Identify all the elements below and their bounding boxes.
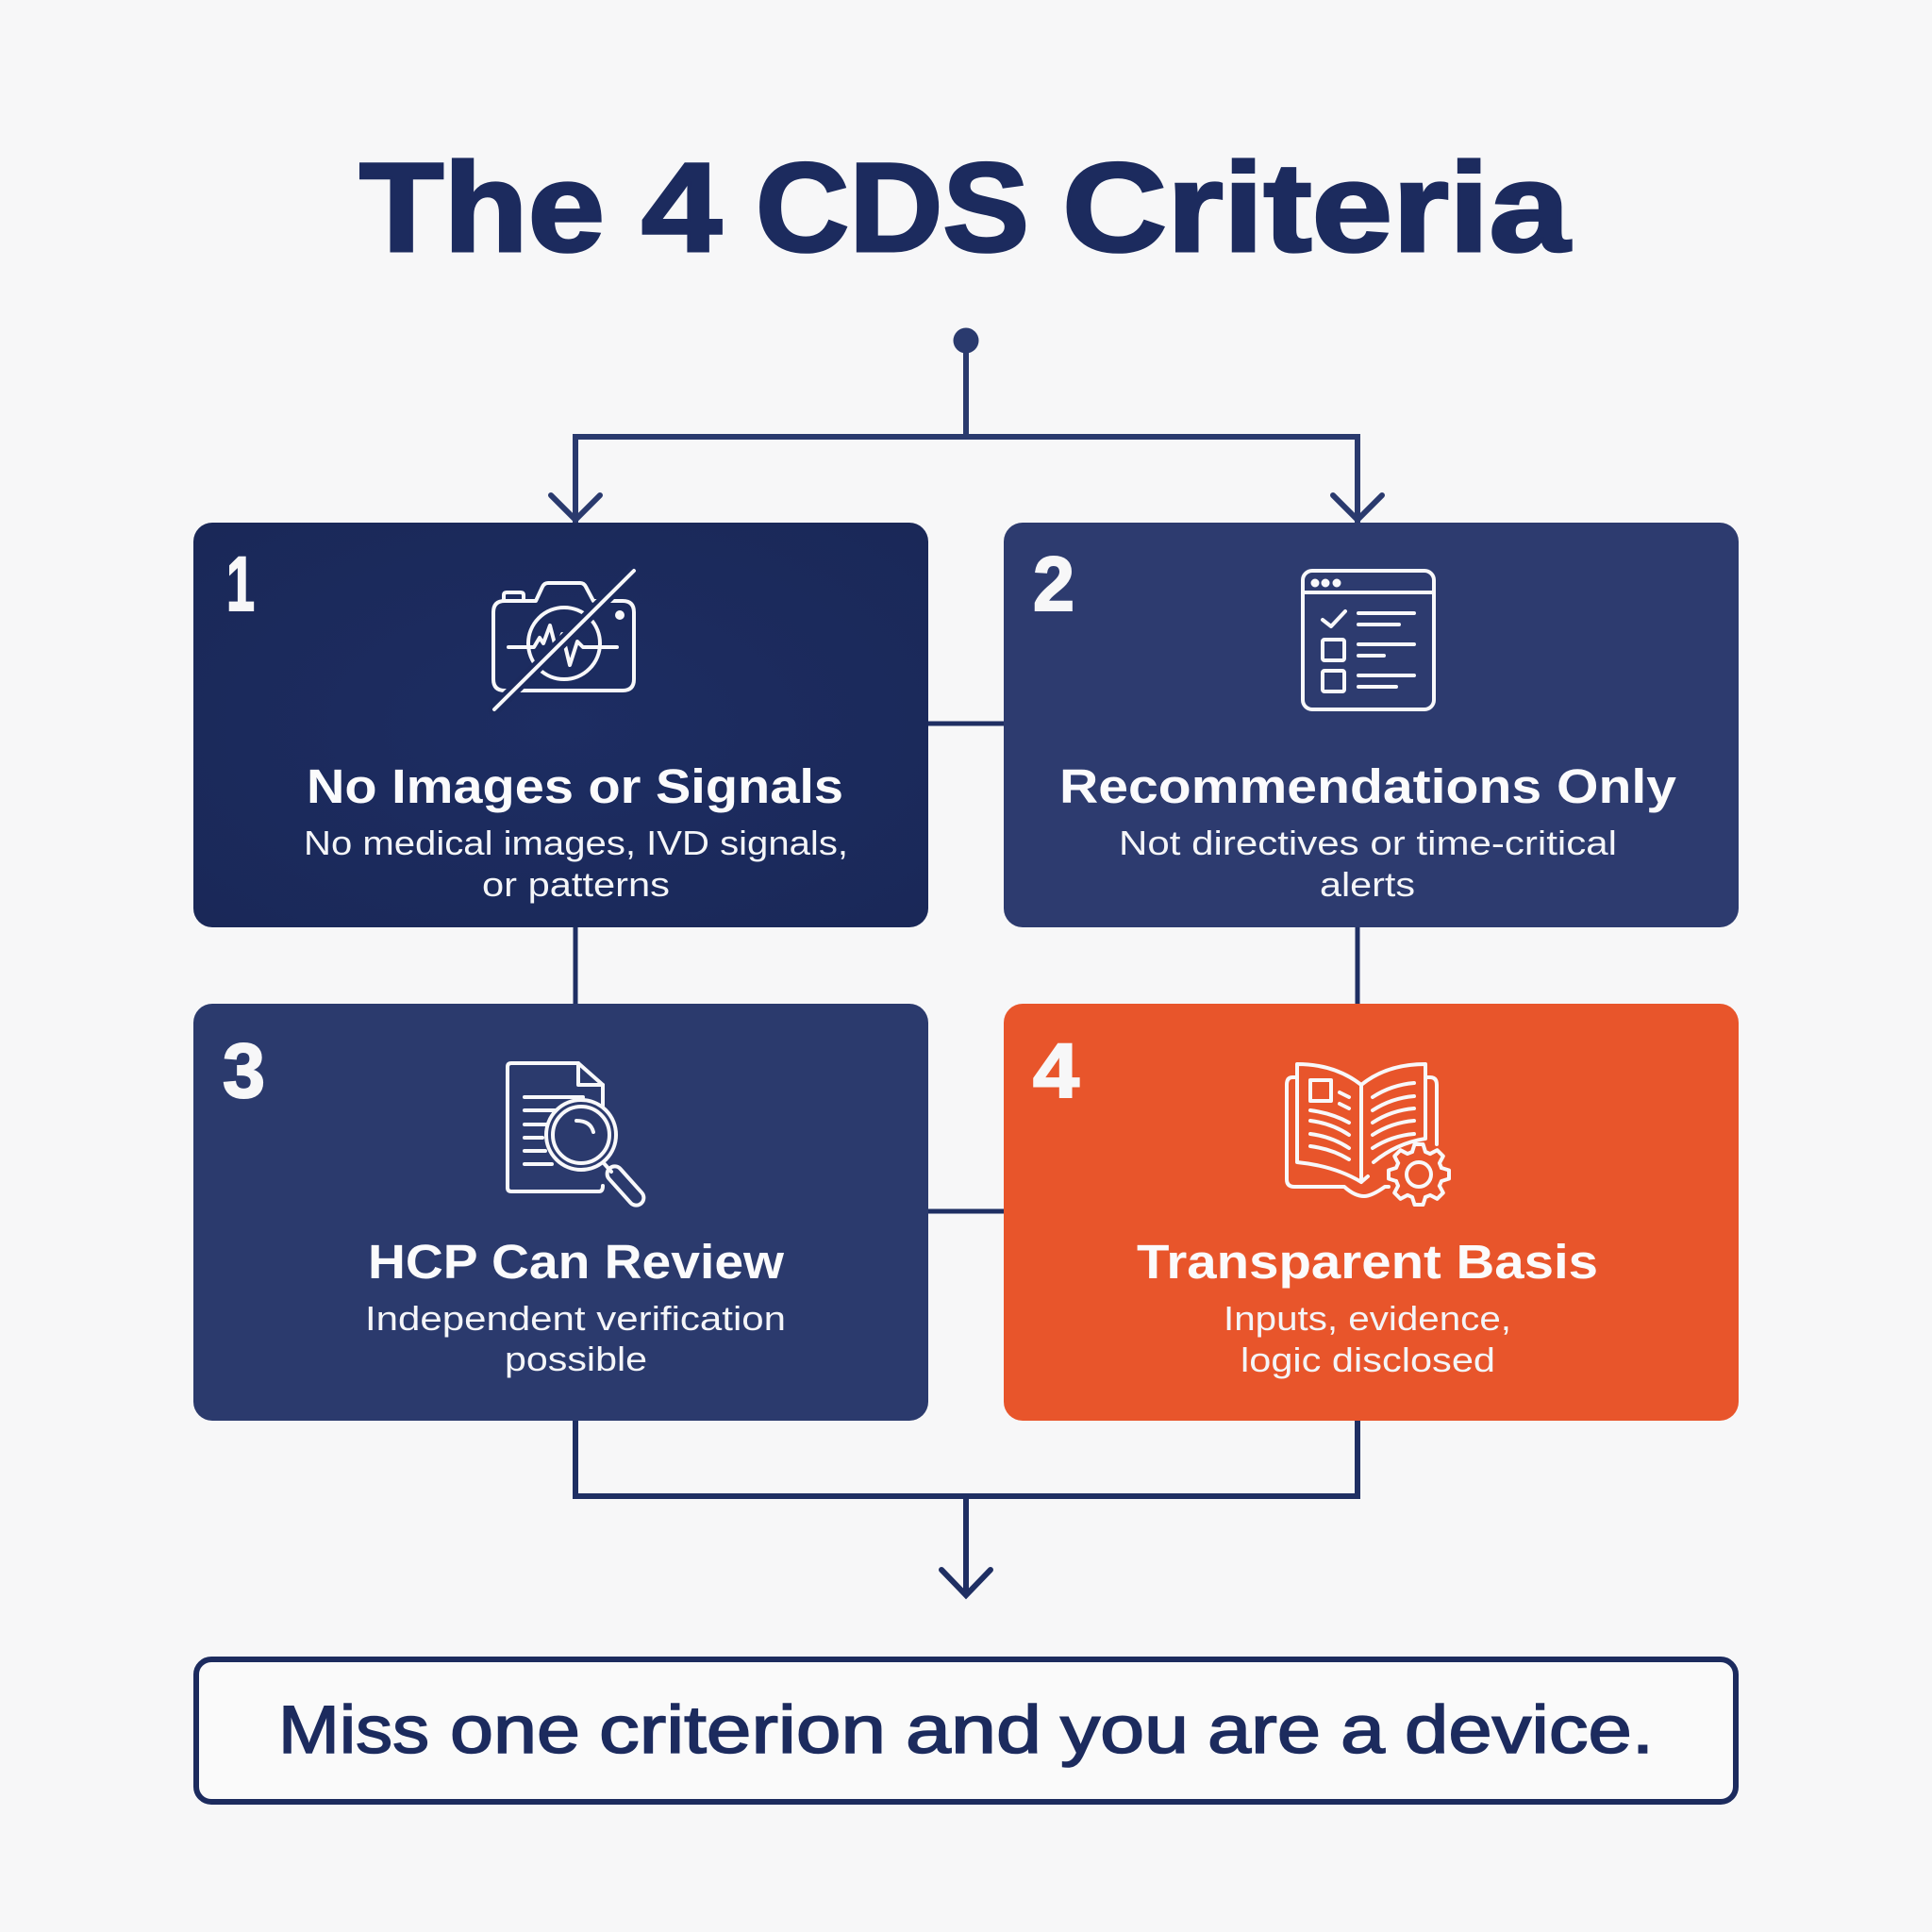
description [1224, 1299, 1511, 1379]
callout text: Miss [278, 1693, 429, 1768]
number 1: 1 [226, 541, 255, 627]
panel: criterion 3 [193, 1004, 928, 1421]
callout text: are [1208, 1693, 1321, 1768]
heading: Recommendations Only [1059, 759, 1677, 813]
output connector with arrow [575, 1417, 1357, 1595]
callout text: criterion [599, 1693, 886, 1768]
heading: Transparent Basis [1137, 1235, 1598, 1289]
description: logic disclosed [1241, 1341, 1495, 1379]
icon: crossed-out camera with signal [493, 571, 634, 709]
title: The [359, 138, 605, 278]
description: or patterns [482, 865, 670, 904]
icon: open book with gear [1287, 1064, 1449, 1205]
callout box [196, 1659, 1736, 1802]
description: Inputs, evidence, [1224, 1299, 1511, 1338]
description: possible [505, 1340, 647, 1378]
callout text: you [1060, 1693, 1189, 1768]
icon: document and magnifier [508, 1063, 647, 1208]
number 3: 3 [223, 1028, 265, 1114]
callout text: one [450, 1693, 580, 1768]
heading: No Images or Signals [307, 759, 843, 813]
start connector with branching arrows [551, 328, 1382, 523]
panel: criterion 1 [193, 523, 928, 927]
title: 4 [641, 138, 722, 278]
panel: criterion 4 (highlight) [1004, 1004, 1739, 1421]
callout text: a [1341, 1693, 1386, 1768]
title: Criteria [1062, 138, 1572, 278]
panel: criterion 2 [1004, 523, 1739, 927]
description [1119, 824, 1617, 904]
description [365, 1299, 786, 1378]
description: alerts [1320, 865, 1415, 904]
description: Not directives or time-critical [1119, 824, 1617, 862]
heading: HCP Can Review [368, 1235, 784, 1289]
title: CDS [756, 138, 1029, 278]
callout text: device. [1405, 1693, 1654, 1768]
description: No medical images, IVD signals, [304, 824, 848, 862]
description: Independent verification [365, 1299, 786, 1338]
connectors between cards [575, 724, 1357, 1211]
number 2: 2 [1033, 541, 1074, 627]
number 4: 4 [1033, 1028, 1079, 1114]
icon: checklist window [1303, 571, 1434, 709]
callout text: and [906, 1693, 1041, 1768]
description [304, 824, 848, 904]
